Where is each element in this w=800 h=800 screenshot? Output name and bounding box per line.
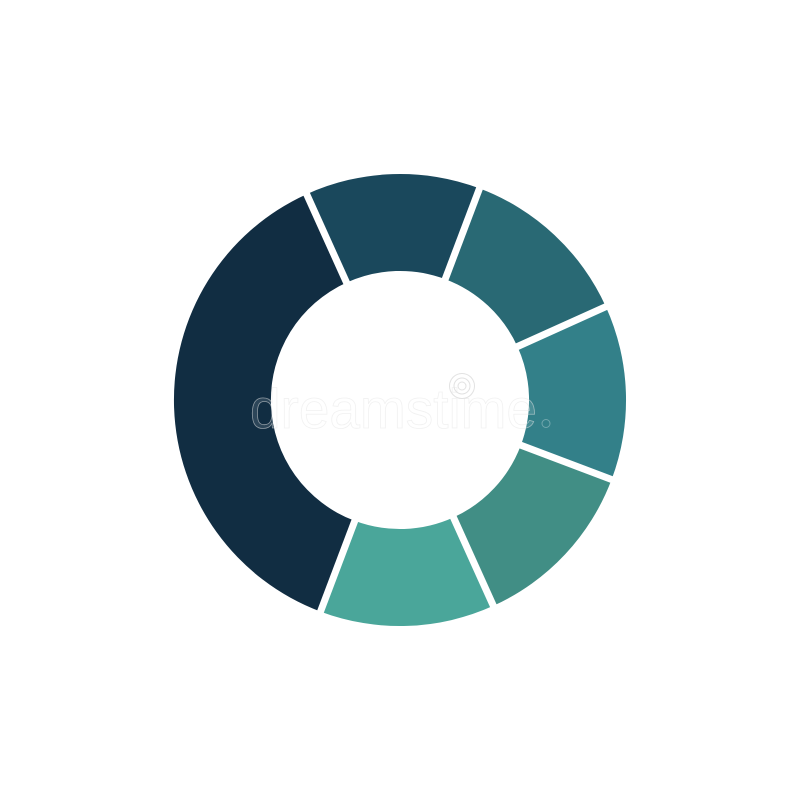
watermark text: dreamstime xyxy=(250,377,537,440)
watermark xyxy=(250,374,550,440)
segment 6: light teal xyxy=(320,518,493,626)
segment 5: green teal xyxy=(453,445,612,606)
watermark spiral logo xyxy=(450,374,474,398)
watermark registered mark xyxy=(542,420,550,428)
segment 2: dark teal-blue xyxy=(307,174,480,282)
segment 3: deep teal xyxy=(445,188,606,347)
segment 4: teal xyxy=(518,307,626,480)
segment 1: large navy xyxy=(174,194,355,612)
donut chart xyxy=(174,174,626,626)
